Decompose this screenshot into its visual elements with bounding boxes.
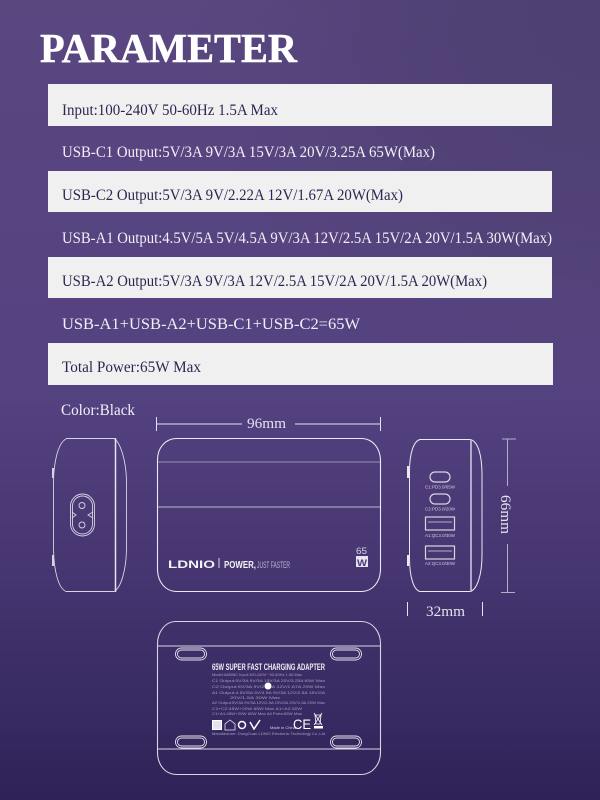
row: USB-A2 output	[48, 257, 552, 298]
port: USB-C1: C1:PD3.0/65W	[425, 484, 456, 490]
65W badge: 65	[356, 546, 367, 556]
row: USB-C1 output: USB-C1 Output:5V/3A 9V/3A 15V/3A 20V/3.25A 65W(Max)	[62, 144, 435, 161]
row: USB-C2 output: USB-C2 Output:5V/3A 9V/2.22A 12V/1.67A 20W(Max)	[62, 187, 403, 204]
label specification text: C1+C2:45W+20W 65W Max A1+A2:30W	[212, 706, 302, 711]
parameter table	[48, 84, 553, 385]
height dimension: 66mm: 66mm	[497, 495, 513, 534]
row: input	[48, 84, 552, 126]
port: USB-A1: A1:QC3.0/30W	[425, 533, 456, 538]
certification marks	[212, 713, 323, 732]
port: USB-C2: C2:PD3.0/20W	[425, 506, 456, 512]
device: side view with plug socket	[53, 438, 126, 592]
device: port view	[408, 439, 482, 592]
row: USB-A1 output: USB-A1 Output:4.5V/5A 5V/4.5A 9V/3A 12V/2.5A 15V/2A 20V/1.5A 30W(Max)	[62, 230, 552, 247]
label specification text	[212, 672, 325, 736]
label specification text: Model:A6506C Input:100-240V~ 50-60Hz 1.5A Max	[212, 672, 302, 677]
title: PARAMETER	[40, 25, 297, 71]
label specification text: C2 Output:5V/3A 9V/2.22A 12V/1.67A 20W Max	[212, 684, 325, 689]
logo: LDNIO	[168, 559, 216, 571]
tagline: POWER,	[224, 560, 256, 571]
row: combined output: USB-A1+USB-A2+USB-C1+USB-C2=65W	[62, 316, 361, 333]
certification marks: CE	[293, 716, 311, 732]
height dimension: 66mm	[497, 439, 516, 592]
label specification text: A2 Output:5V/3A 9V/3A 12V/2.5A 15V/2A 20V/1.5A 20W Max	[212, 700, 325, 705]
label specification text: 20V/1.5A 30W Max	[230, 695, 280, 700]
certification marks: Made in China	[270, 725, 297, 730]
label specification text: Manufacturer: DongGuan LDNIO Electronic Technology Co.,Ltd	[212, 731, 325, 736]
width dimension: 96mm	[156, 416, 380, 432]
label heading: 65W SUPER FAST CHARGING ADAPTER	[212, 662, 325, 672]
row: total power: Total Power:65W Max	[62, 359, 201, 376]
port: USB-C2	[425, 494, 456, 512]
device: bottom view with label	[158, 622, 380, 774]
row: USB-C2 output	[48, 171, 552, 212]
label hole	[264, 682, 272, 690]
icon: plug socket	[70, 494, 94, 536]
width dimension: 96mm: 96mm	[247, 416, 286, 432]
port: USB-A1	[425, 517, 456, 538]
65W badge: W	[357, 558, 368, 568]
device: front view: JUST FASTER	[257, 560, 290, 570]
rubber feet	[176, 648, 362, 748]
port: USB-C1	[425, 472, 456, 490]
row: input: Input:100-240V 50-60Hz 1.5A Max	[62, 102, 278, 119]
label specification text: C1 Output:5V/3A 9V/3A 15V/3A 20V/3.25A 65W Max	[212, 678, 325, 683]
row: total power	[48, 343, 553, 385]
label specification text: C1+A1:45W+20W 65W Max All Ports:65W Max	[212, 711, 302, 716]
port: USB-A2	[425, 546, 456, 566]
colour label: Color:Black	[61, 402, 135, 419]
port: USB-A2: A2:QC3.0/30W	[425, 561, 456, 566]
device: front view	[158, 438, 380, 592]
depth dimension: 32mm	[408, 602, 482, 620]
label specification text: A1 Output:4.5V/5A 5V/4.5A 9V/3A 12V/2.5A 15V/2A	[212, 690, 325, 695]
65W badge	[356, 546, 368, 568]
depth dimension: 32mm: 32mm	[426, 604, 465, 620]
row: USB-A2 output: USB-A2 Output:5V/3A 9V/3A 12V/2.5A 15V/2A 20V/1.5A 20W(Max)	[62, 273, 487, 290]
